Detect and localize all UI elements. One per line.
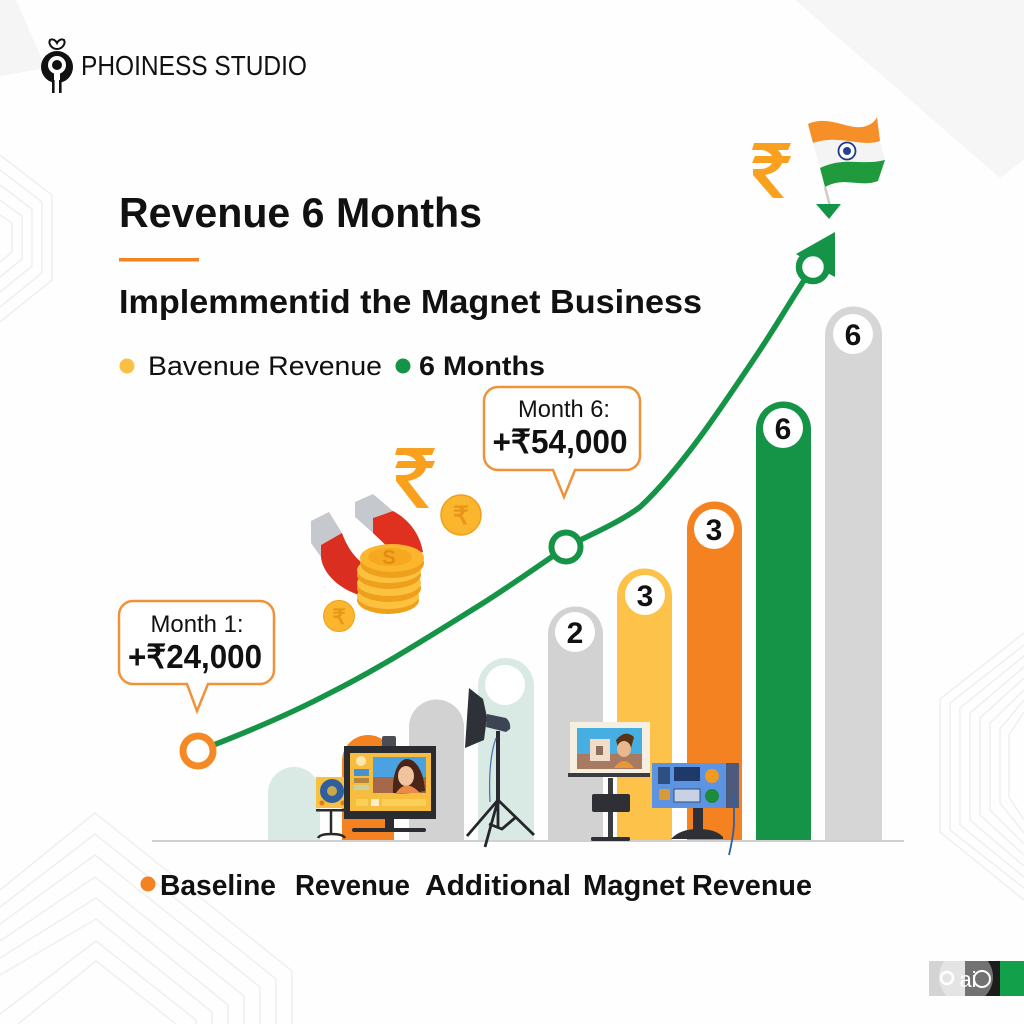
bar 5 — [548, 606, 603, 840]
callout: month 6: +₹54,000 — [492, 423, 628, 460]
title underline — [119, 258, 199, 262]
icon: framed picture on stand — [568, 722, 650, 841]
callout: month 1: +₹24,000 — [128, 638, 262, 675]
icon: magnet with coin stack — [311, 494, 424, 614]
bar 8 — [756, 401, 811, 840]
icon: rupee coin right — [441, 495, 481, 535]
bar 7 — [687, 501, 742, 840]
magnet — [311, 494, 423, 596]
icon: rupee coin left — [324, 600, 354, 632]
bar chart — [152, 306, 904, 842]
bar 9: 6 — [845, 319, 861, 352]
brand name: PHOINESS STUDIO — [81, 50, 307, 81]
watermark badge: ai — [959, 967, 977, 992]
bar 3 — [409, 700, 464, 840]
icon: logo mark — [41, 39, 73, 93]
bar 9 — [825, 306, 882, 840]
bottom legend: Additional — [425, 870, 571, 902]
point: top — [799, 253, 827, 281]
legend: Bavenue Revenue — [148, 351, 382, 381]
bar 8: 6 — [775, 413, 791, 446]
coin stack: S — [382, 547, 396, 569]
icon: indian flag — [808, 117, 885, 219]
bottom legend: Magnet — [583, 870, 685, 902]
icon: rupee symbol large — [395, 448, 435, 508]
bar 7: 3 — [706, 514, 722, 547]
icon: rupee symbol top — [752, 143, 791, 198]
bar 2 — [342, 735, 394, 840]
bar 4 — [478, 658, 534, 840]
logo — [41, 39, 307, 93]
icon: blue control panel — [652, 763, 739, 855]
icon: softbox light on tripod — [465, 688, 534, 847]
icon: rupee coin left: ₹ — [332, 606, 346, 629]
legend — [120, 351, 545, 381]
bottom legend: Baseline — [160, 870, 276, 902]
point: month 6 — [552, 532, 580, 562]
bar 5: 2 — [567, 617, 583, 650]
callout: month 6 — [484, 387, 640, 497]
callout: month 1: Month 1: — [150, 611, 244, 638]
bottom legend: Revenue — [295, 870, 410, 902]
bottom legend — [140, 870, 812, 902]
bar 6 — [617, 568, 672, 840]
point: month 1 — [183, 736, 213, 766]
growth line — [183, 232, 835, 766]
legend: 6 Months — [419, 351, 545, 381]
callout: month 1 — [119, 601, 274, 711]
arrow head — [796, 232, 835, 277]
bar 6: 3 — [637, 580, 653, 613]
watermark badge — [929, 950, 1024, 1004]
bar 1 — [268, 767, 320, 840]
icon: monitor — [344, 736, 436, 832]
subtitle: Implemmentid the Magnet Business — [119, 283, 702, 320]
title: Revenue 6 Months — [119, 189, 482, 236]
icon: speaker target — [316, 777, 347, 838]
icon: rupee coin right: ₹ — [453, 502, 469, 530]
callout: month 6: Month 6: — [518, 396, 610, 423]
bottom legend: Revenue — [692, 870, 812, 902]
